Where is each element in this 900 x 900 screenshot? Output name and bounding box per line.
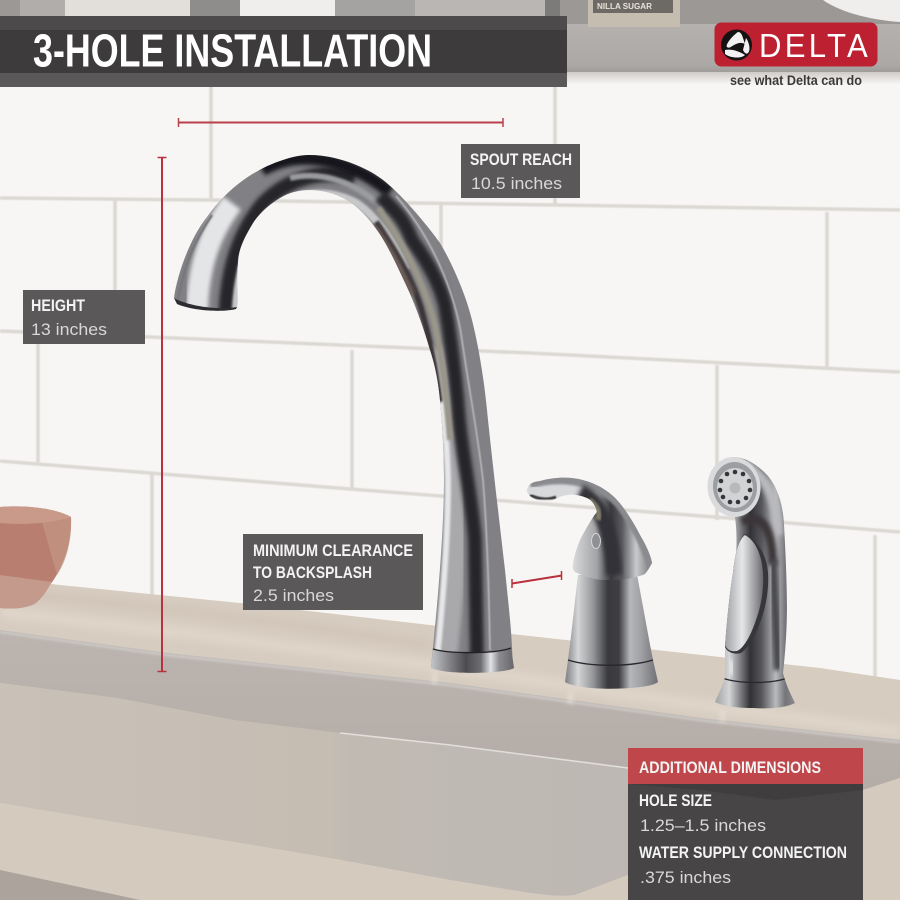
sink front rim <box>0 778 900 900</box>
panel: additional dimensions <box>628 748 863 900</box>
handle lever and cap <box>527 478 652 580</box>
label: height: HEIGHT <box>31 296 86 315</box>
faucet base ring <box>431 648 514 673</box>
label: height <box>23 290 145 344</box>
panel body: 1.25–1.5 inches <box>640 816 766 835</box>
main faucet: gooseneck spout and stem <box>174 155 514 673</box>
panel body: .375 inches <box>640 868 731 887</box>
handle faucet <box>527 478 658 689</box>
dimension line: clearance <box>512 571 562 588</box>
Delta logo: DELTA <box>759 27 868 64</box>
label: minimum clearance <box>243 534 423 610</box>
tagline: see what Delta can do <box>730 72 862 88</box>
bowl on counter <box>0 506 71 609</box>
label: spout reach: SPOUT REACH <box>470 150 572 169</box>
label: minimum clearance: TO BACKSPLASH <box>253 563 372 582</box>
label: minimum clearance: 2.5 inches <box>253 586 334 605</box>
sprayer nozzle <box>705 454 763 520</box>
counter reflections under fixtures <box>432 672 725 722</box>
panel body: HOLE SIZE <box>639 791 712 810</box>
sink basin <box>0 683 628 896</box>
handle body <box>565 575 658 689</box>
panel body: WATER SUPPLY CONNECTION <box>639 843 847 862</box>
dimension line: height <box>158 157 166 672</box>
jar label: NILLA SUGAR <box>597 2 652 11</box>
dimension line: spout reach <box>178 118 503 127</box>
spout shading <box>178 158 490 660</box>
panel header: ADDITIONAL DIMENSIONS <box>639 758 821 777</box>
title banner <box>0 16 567 87</box>
label: minimum clearance: MINIMUM CLEARANCE <box>253 541 413 560</box>
side sprayer <box>705 454 795 708</box>
title text: 3-HOLE INSTALLATION <box>33 24 432 76</box>
panel header <box>628 748 863 784</box>
sprayer button <box>725 534 768 654</box>
countertop front edge <box>0 630 900 790</box>
spout aerator <box>174 298 237 311</box>
label: height: 13 inches <box>31 320 107 339</box>
jar label <box>588 0 680 27</box>
Delta logo <box>714 22 878 88</box>
countertop surface <box>0 578 900 900</box>
label: spout reach: 10.5 inches <box>471 174 562 193</box>
logo emblem <box>721 30 752 60</box>
shelf and objects at top <box>0 0 900 84</box>
panel body <box>628 784 863 900</box>
label: spout reach <box>461 144 580 198</box>
